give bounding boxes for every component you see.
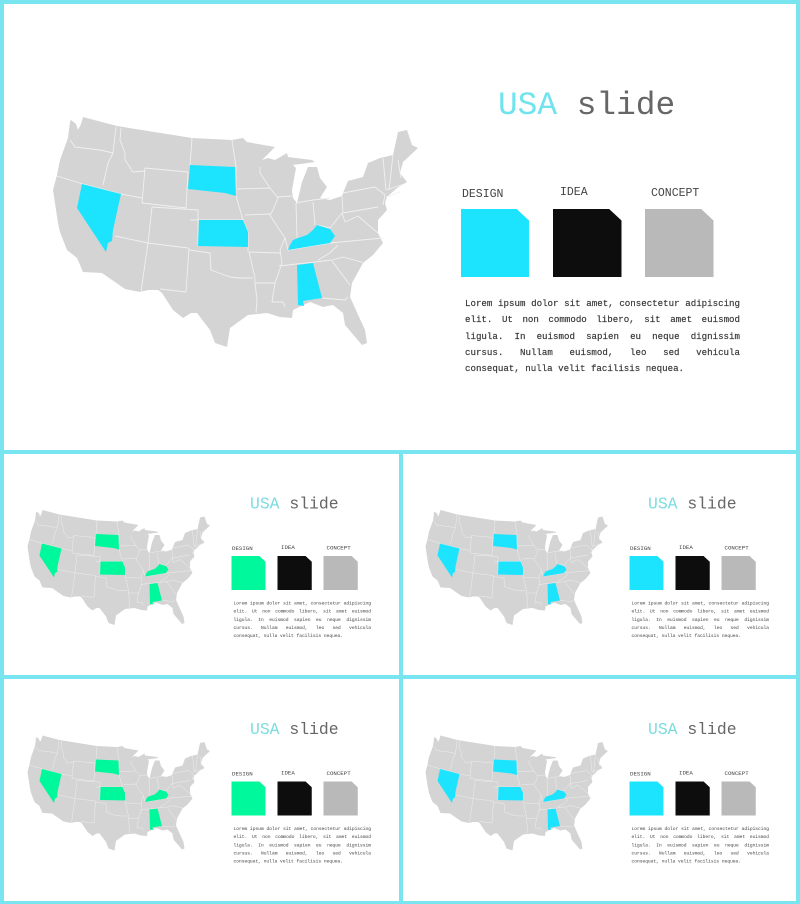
text block: elit. Ut non commodo libero, sit amet euismod (465, 314, 740, 325)
map: USA with green states (28, 736, 210, 850)
map: USA with cyan states (426, 736, 608, 850)
title: USA slide (648, 495, 737, 514)
text block: elit. Ut non commodo libero, sit amet euismod (632, 609, 769, 614)
swatch: concept (722, 782, 756, 816)
label: concept: CONCEPT (651, 187, 699, 200)
swatch: design (629, 556, 664, 590)
text block: ligula. In euismod sapien eu neque dignissim (465, 330, 740, 342)
text block: elit. Ut non commodo libero, sit amet euismod (632, 834, 769, 840)
map: USA with highlighted states (53, 117, 418, 347)
label: design: DESIGN (462, 188, 503, 201)
swatch: idea (553, 209, 622, 277)
text block: ligula. In euismod sapien eu neque dignissim (632, 842, 769, 848)
text block (632, 600, 769, 638)
swatch: design (629, 782, 664, 816)
panel: main USA slide (53, 87, 740, 374)
text block: cursus. Nullam euismod, leo sed vehicula (234, 625, 371, 630)
title: USA slide (250, 720, 339, 739)
swatch: design (231, 782, 266, 816)
swatch: idea (676, 782, 710, 816)
text block (465, 298, 740, 374)
map: USA with cyan states (426, 510, 608, 625)
panel: thumbnail bottom right, cyan (426, 720, 769, 864)
text block: ligula. In euismod sapien eu neque dignissim (234, 842, 371, 848)
text block: consequat, nulla velit facilisis nequea. (632, 858, 741, 864)
text block: cursus. Nullam euismod, leo sed vehicula (465, 347, 740, 358)
text block: Lorem ipsum dolor sit amet, consectetur adipiscing (234, 600, 371, 606)
label: design: DESIGN (232, 771, 253, 778)
swatch: concept (324, 782, 358, 816)
swatch: design (460, 209, 529, 277)
text block: Lorem ipsum dolor sit amet, consectetur adipiscing (632, 600, 769, 606)
text block: consequat, nulla velit facilisis nequea. (632, 633, 741, 638)
title: USA slide (498, 87, 675, 124)
title: USA slide (648, 720, 737, 739)
label: concept: CONCEPT (326, 545, 351, 552)
swatch: concept (722, 556, 756, 590)
text block (234, 826, 371, 864)
text block: cursus. Nullam euismod, leo sed vehicula (632, 625, 769, 630)
text block: Lorem ipsum dolor sit amet, consectetur adipiscing (632, 826, 769, 832)
label: concept: CONCEPT (326, 770, 351, 777)
swatch: idea (676, 556, 710, 590)
label: design: DESIGN (630, 546, 651, 552)
text block: cursus. Nullam euismod, leo sed vehicula (234, 850, 371, 856)
label: design: DESIGN (232, 546, 253, 552)
panel: thumbnail bottom left, green (28, 720, 371, 864)
text block: ligula. In euismod sapien eu neque dignissim (632, 617, 769, 622)
swatch: design (231, 556, 266, 590)
text block: Lorem ipsum dolor sit amet, consectetur adipiscing (465, 298, 740, 309)
panel: thumbnail top left, green (28, 495, 371, 638)
label: idea: IDEA (679, 770, 693, 776)
panel: thumbnail top right, cyan (426, 495, 769, 638)
label: concept: CONCEPT (724, 770, 749, 777)
text block: consequat, nulla velit facilisis nequea. (234, 858, 343, 864)
label: concept: CONCEPT (724, 545, 749, 552)
label: idea: IDEA (560, 186, 588, 199)
text block: elit. Ut non commodo libero, sit amet euismod (234, 834, 371, 840)
text block: cursus. Nullam euismod, leo sed vehicula (632, 850, 769, 856)
text block: consequat, nulla velit facilisis nequea. (465, 363, 684, 374)
swatch: concept (645, 209, 714, 277)
text block: elit. Ut non commodo libero, sit amet euismod (234, 609, 371, 614)
swatch: concept (324, 556, 358, 590)
label: idea: IDEA (281, 544, 295, 551)
label: idea: IDEA (281, 770, 295, 776)
swatch: idea (278, 556, 312, 590)
title: USA slide (250, 495, 339, 514)
swatch: idea (278, 782, 312, 816)
text block (632, 826, 769, 864)
text block (234, 600, 371, 638)
text block: Lorem ipsum dolor sit amet, consectetur adipiscing (234, 826, 371, 832)
label: idea: IDEA (679, 544, 693, 551)
text block: consequat, nulla velit facilisis nequea. (234, 633, 343, 638)
text block: ligula. In euismod sapien eu neque dignissim (234, 617, 371, 622)
map: USA with green states (28, 510, 210, 625)
label: design: DESIGN (630, 771, 651, 778)
